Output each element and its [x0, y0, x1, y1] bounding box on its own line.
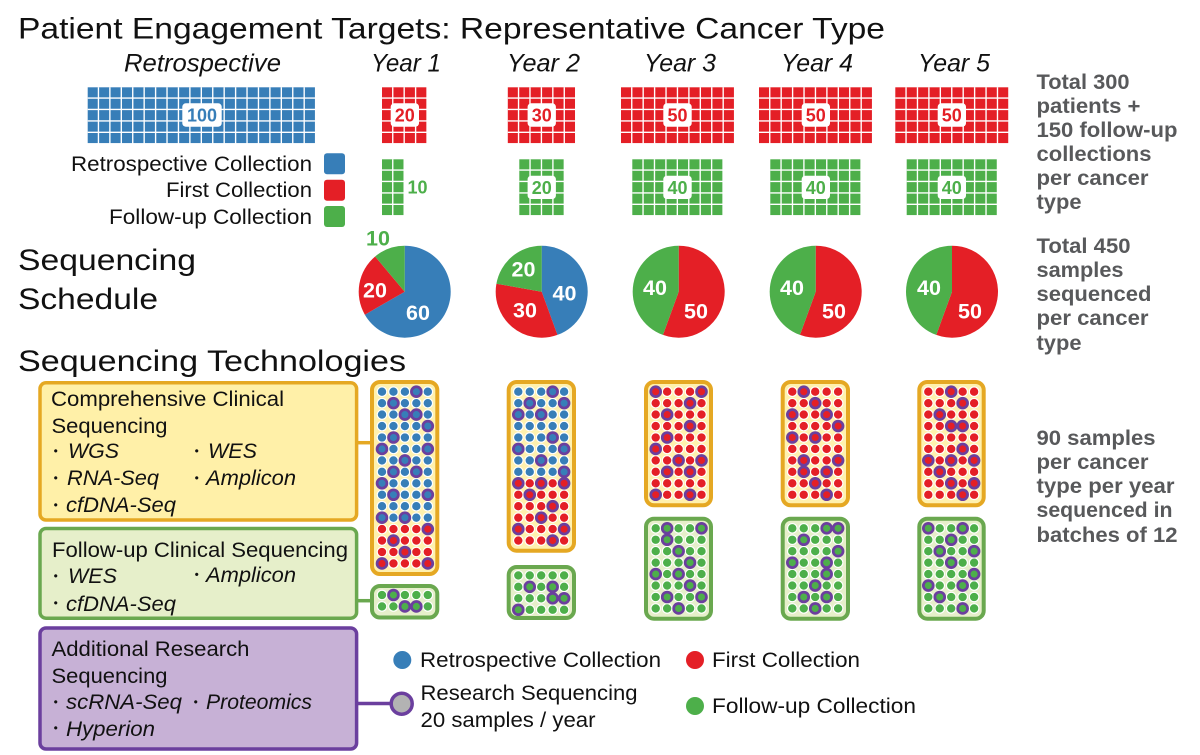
legend: collection types: Retrospective Collection [71, 153, 312, 176]
panel: follow-up clinical sequencing: • [54, 596, 58, 610]
panel: comprehensive clinical sequencing: Sequencing [52, 415, 168, 438]
plate: year 2 follow-up [509, 567, 574, 618]
summary: patients: Total 300 [1036, 71, 1130, 94]
heading: sequencing schedule: Schedule [18, 283, 158, 316]
patient grid: year 4 follow-up 40: 40 [806, 178, 826, 198]
summary: batches [1036, 427, 1178, 547]
panel: comprehensive clinical sequencing [40, 383, 357, 520]
panel: comprehensive clinical sequencing: • [195, 444, 199, 458]
summary: samples sequenced [1036, 235, 1152, 355]
panel: additional research sequencing: • [54, 721, 58, 735]
connector: follow-up [356, 599, 372, 602]
panel: comprehensive clinical sequencing: Comprehensive Clinical [51, 388, 284, 411]
summary: patients: per cancer [1036, 167, 1148, 190]
summary: batches: sequenced in [1036, 499, 1172, 522]
patient grid: year 5 follow-up 40: 40 [942, 178, 962, 198]
panel: follow-up clinical sequencing: • [54, 569, 58, 583]
heading: sequencing technologies: Sequencing Technologies [18, 345, 406, 378]
pie: year 4: 40 [780, 276, 804, 300]
panel: additional research sequencing: Hyperion [66, 718, 155, 741]
pie: year 3: 50 [684, 299, 708, 323]
column headings: Year 1 [371, 50, 441, 78]
panel: comprehensive clinical sequencing: RNA-Seq [67, 467, 159, 490]
patient grid: year 5 first collection 50: 50 [942, 106, 962, 126]
plate: year 5 follow-up [919, 519, 984, 619]
plate: year 3 follow-up [646, 519, 711, 619]
column headings [124, 50, 990, 78]
panel: additional research sequencing: • [194, 695, 198, 709]
patient grid: year 1 follow-up 10: 10 [407, 178, 428, 198]
pie: year 2 [496, 246, 588, 338]
patient grid: year 4 first collection 50: 50 [806, 106, 826, 126]
patient grid: year 1 first collection 20 [382, 87, 428, 144]
summary: patients: patients + [1036, 95, 1140, 118]
summary: batches: batches of 12 [1036, 524, 1178, 547]
panel: follow-up clinical sequencing [40, 528, 357, 618]
panel: additional research sequencing: Proteomics [206, 691, 313, 714]
panel: additional research sequencing: • [54, 695, 58, 709]
plate: year 5 first collection [919, 382, 984, 505]
panel: comprehensive clinical sequencing: • [54, 444, 58, 458]
panel: follow-up clinical sequencing: Amplicon [204, 564, 296, 587]
patient grid: year 4 first collection 50 [759, 87, 873, 144]
legend: plate sample colours [393, 649, 916, 718]
patient grid: year 3 follow-up 40: 40 [667, 178, 688, 198]
patient grid: retrospective 100 [88, 87, 316, 144]
column headings: Year 4 [781, 50, 853, 78]
panel: comprehensive clinical sequencing: cfDNA-Seq [66, 494, 176, 517]
patient grid: year 3 first collection 50: 50 [667, 106, 688, 126]
pie: year 5 [906, 246, 998, 338]
patient grid: year 4 follow-up 40 [770, 159, 862, 216]
heading: sequencing schedule: Sequencing [18, 244, 196, 277]
legend: research sequencing marker: 20 samples / year [420, 709, 596, 732]
panel: additional research sequencing: Additional Research [52, 638, 250, 661]
column headings: Retrospective [124, 50, 281, 78]
legend: plate sample colours: Retrospective Collection [420, 649, 661, 672]
patient grid: year 2 first collection 30: 30 [532, 106, 552, 126]
summary: batches: 90 samples [1036, 427, 1156, 450]
legend: plate sample colours: Follow-up Collection [712, 695, 916, 718]
patient grid: year 3 follow-up 40 [632, 159, 724, 216]
column headings: Year 5 [918, 50, 990, 78]
panel: additional research sequencing [40, 628, 357, 749]
panel: follow-up clinical sequencing: • [195, 568, 199, 582]
pie: year 5: 40 [917, 276, 941, 300]
pie: year 4 [770, 246, 862, 338]
panel: additional research sequencing: Sequencing [52, 665, 168, 688]
plate: year 2 first collection [509, 382, 574, 551]
connector: comprehensive [356, 441, 372, 444]
panel: comprehensive clinical sequencing: • [195, 471, 199, 485]
patient grid: year 5 follow-up 40 [907, 159, 998, 216]
patient grid: year 2 follow-up 20: 20 [532, 178, 552, 198]
panel: comprehensive clinical sequencing: WES [208, 440, 257, 463]
pie: retrospective: 20 [363, 279, 387, 303]
summary: patients: type [1036, 191, 1082, 214]
patient grid: year 2 follow-up 20 [519, 159, 565, 216]
summary: batches: per cancer [1036, 451, 1148, 474]
column headings: Year 2 [507, 50, 580, 78]
summary: samples sequenced: per cancer [1036, 307, 1148, 330]
plate: retrospective follow-up [372, 586, 437, 618]
patient grid: year 1 first collection 20: 20 [395, 106, 415, 126]
panel: follow-up clinical sequencing: Follow-up Clinical Sequencing [52, 539, 348, 562]
summary: samples sequenced: Total 450 [1036, 235, 1130, 258]
pie: year 4: 50 [822, 299, 846, 323]
patient grid: year 1 follow-up 10 [382, 159, 428, 216]
title: Patient Engagement Targets: Representative Cancer Type [18, 12, 885, 46]
pie: retrospective: 60 [406, 301, 430, 325]
pie: retrospective: 10 [366, 227, 390, 251]
legend: research sequencing marker: Research Sequencing [420, 682, 638, 705]
pie: year 3 [633, 246, 725, 338]
summary: batches: type per year [1036, 475, 1174, 498]
panel: comprehensive clinical sequencing: • [54, 498, 58, 512]
heading: sequencing schedule [18, 244, 196, 316]
panel: follow-up clinical sequencing: WES [68, 565, 117, 588]
summary: patients: 150 follow-up [1036, 119, 1178, 142]
legend: collection types [71, 153, 345, 229]
patient grid: year 3 first collection 50 [621, 87, 735, 144]
pie: year 2: 30 [513, 299, 537, 323]
pie: retrospective [359, 227, 451, 338]
column headings: Year 3 [644, 50, 716, 78]
pie: year 3: 40 [643, 276, 667, 300]
pie: year 2: 20 [512, 258, 535, 282]
summary: patients: collections [1036, 143, 1152, 166]
legend: collection types: Follow-up Collection [109, 206, 312, 229]
legend: research sequencing marker [356, 682, 638, 732]
legend: collection types: First Collection [166, 179, 312, 202]
summary: samples sequenced: samples [1036, 259, 1124, 282]
summary: samples sequenced: sequenced [1036, 283, 1152, 306]
summary: samples sequenced: type [1036, 332, 1082, 355]
legend: plate sample colours: First Collection [712, 649, 860, 672]
plate: year 4 first collection [783, 382, 848, 505]
plate: retrospective first batch [372, 382, 437, 574]
panel: comprehensive clinical sequencing: • [54, 471, 58, 485]
pie: year 5: 50 [958, 299, 982, 323]
panel: comprehensive clinical sequencing: WGS [68, 440, 119, 463]
pie: year 2: 40 [553, 282, 576, 306]
panel: follow-up clinical sequencing: cfDNA-Seq [66, 593, 176, 616]
patient grid: retrospective 100: 100 [187, 106, 217, 126]
patient grid: year 5 first collection 50 [895, 87, 1010, 144]
panel: additional research sequencing: scRNA-Seq [66, 691, 182, 714]
plate: year 4 follow-up [783, 519, 848, 619]
summary: patients [1036, 71, 1178, 214]
panel: comprehensive clinical sequencing: Amplicon [204, 467, 296, 490]
patient grid: year 2 first collection 30 [508, 87, 576, 144]
plate: year 3 first collection [646, 382, 711, 505]
